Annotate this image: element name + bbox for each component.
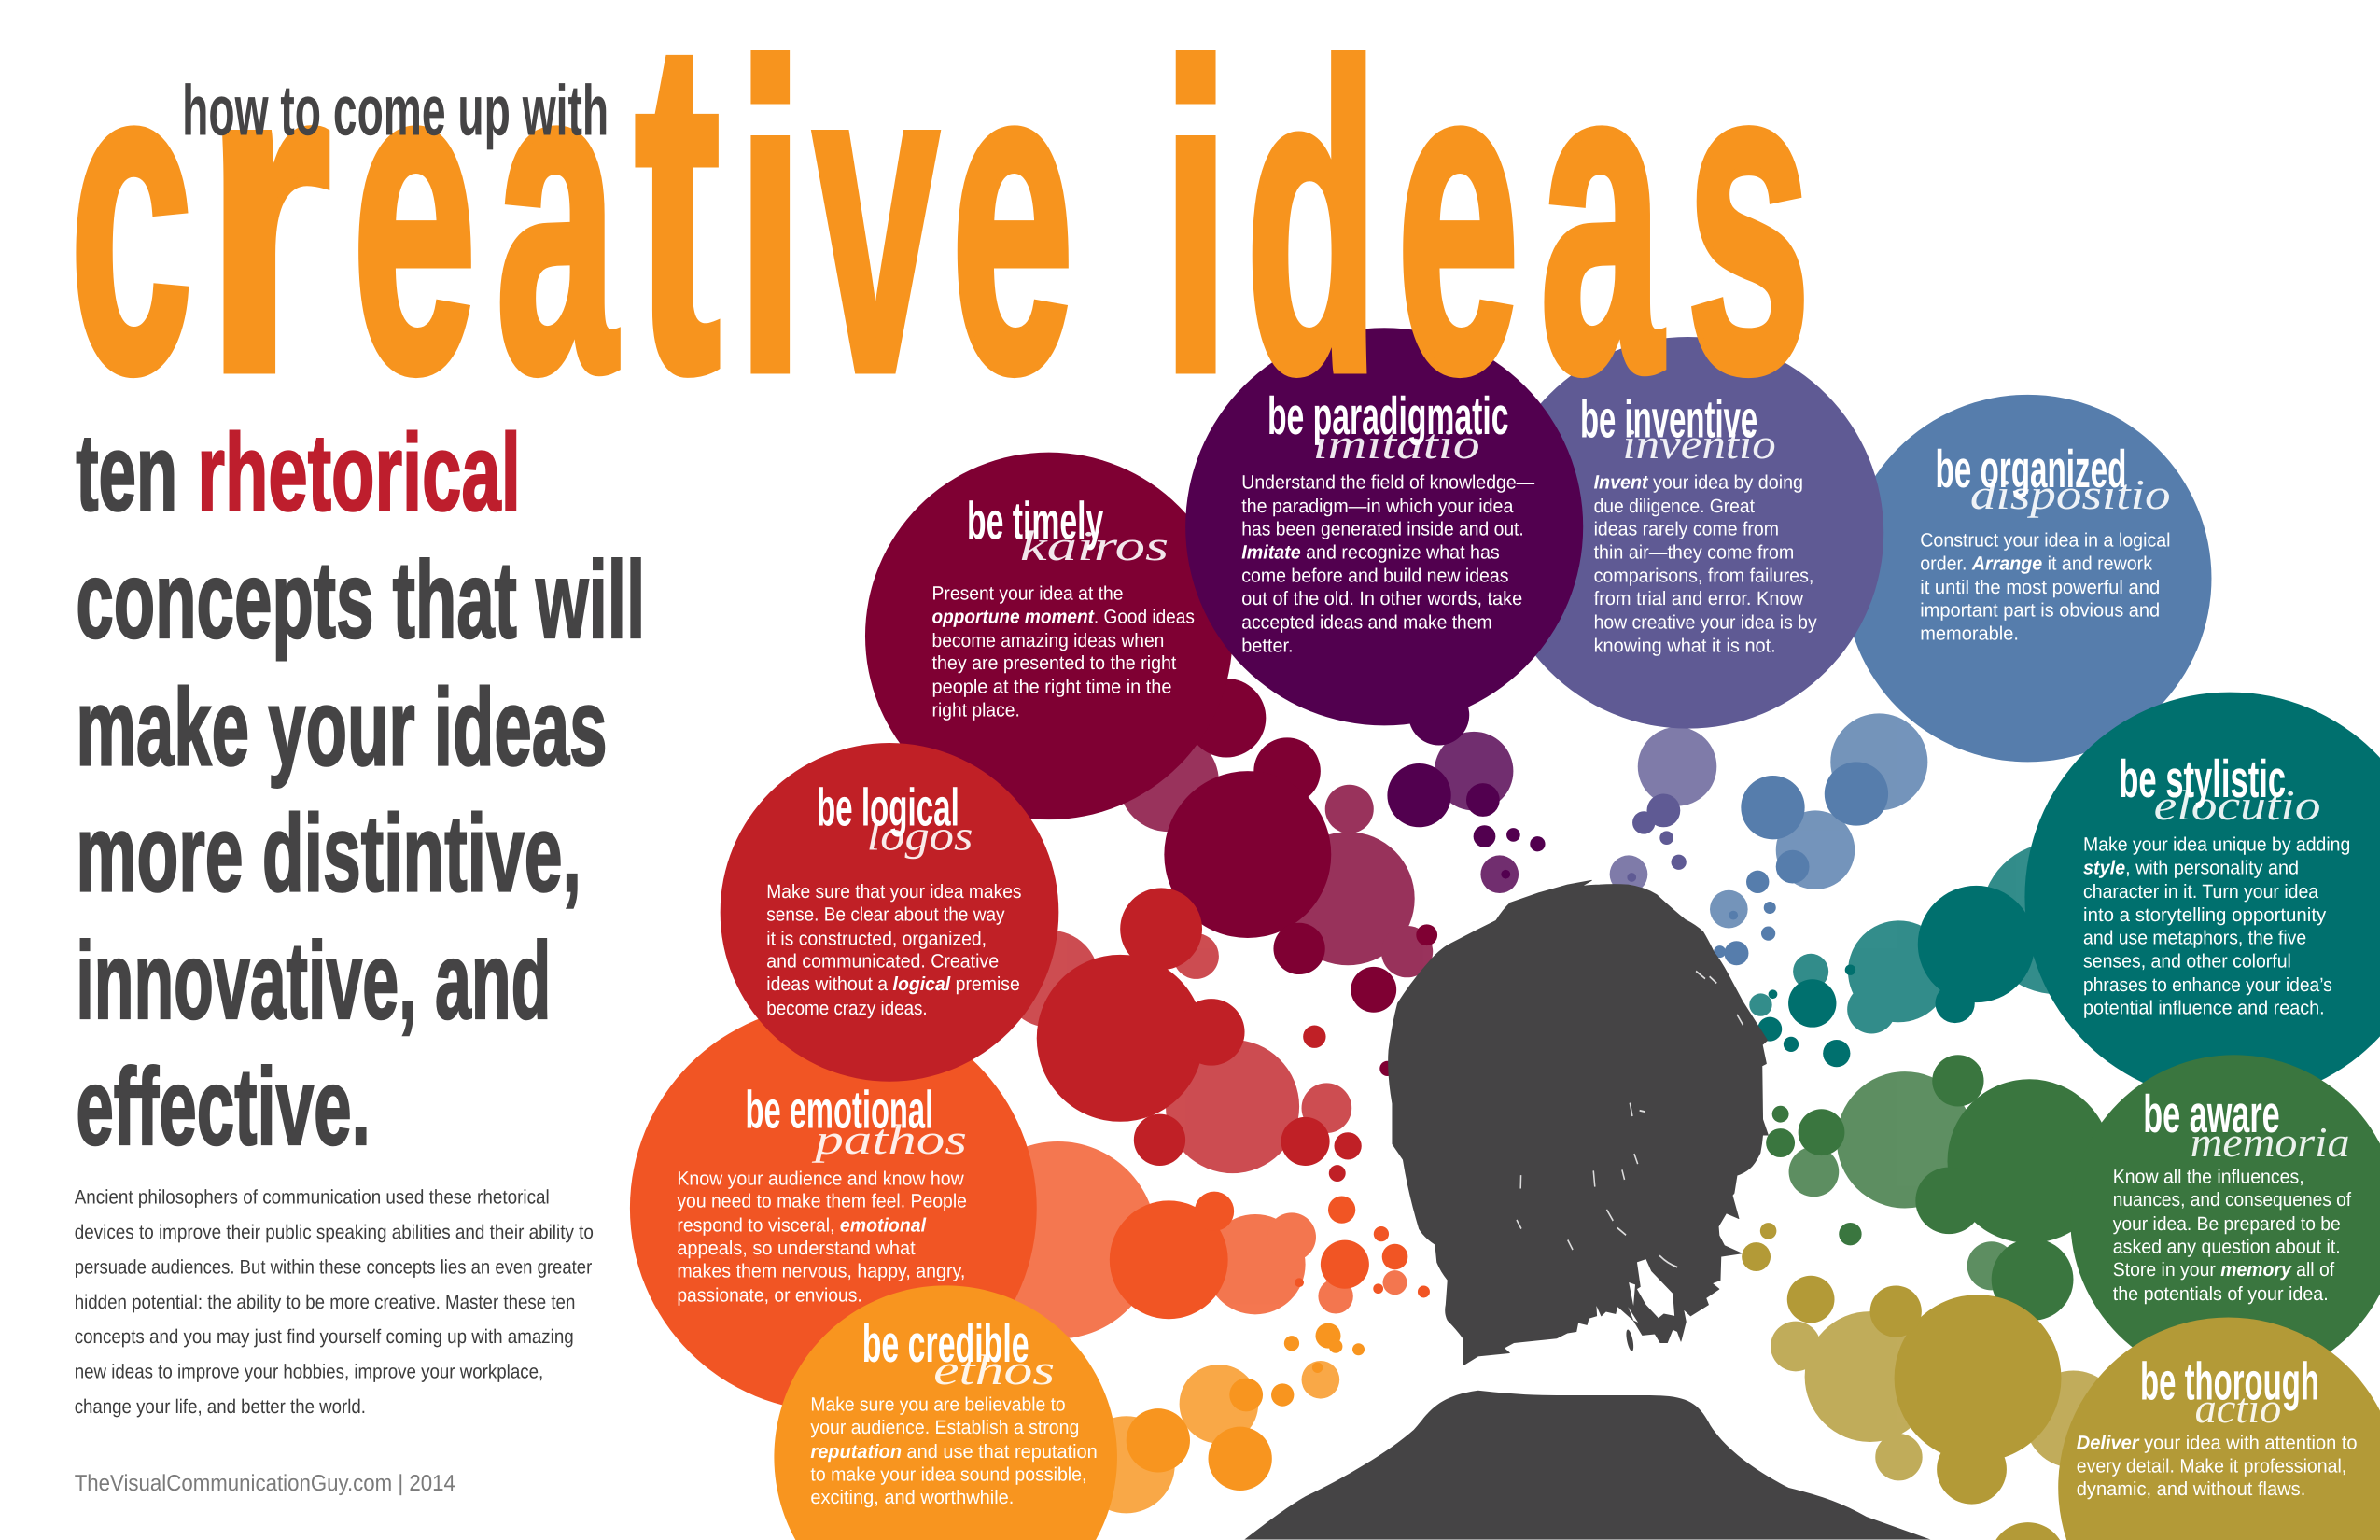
- body: paradigmatic: has been generated inside and out.: [1241, 518, 1524, 539]
- intro paragraph: persuade audiences. But within these concepts lies an even greater: [75, 1255, 593, 1278]
- panel: be paradigmatic: [1185, 328, 1583, 725]
- body: credible: your audience. Establish a strong: [810, 1417, 1079, 1438]
- headline: ten rhetorical concepts: rhetorical: [197, 413, 521, 534]
- body: inventive: knowing what it is not.: [1594, 636, 1776, 656]
- headline: ten rhetorical concepts: more distintive,: [76, 794, 581, 916]
- body: aware: Store in your memory all of: [2113, 1259, 2335, 1281]
- body: inventive: ideas rarely come from: [1594, 518, 1779, 539]
- body: thorough: dynamic, and without flaws.: [2077, 1478, 2305, 1500]
- body: logical: become crazy ideas.: [766, 998, 928, 1019]
- body: emotional: respond to visceral, emotional: [677, 1215, 927, 1237]
- body: emotional: Know your audience and know how: [677, 1168, 965, 1189]
- headline: ten rhetorical concepts: concepts that will: [76, 540, 645, 662]
- body: inventive: [1594, 472, 1818, 656]
- body: timely: Present your idea at the: [932, 582, 1123, 604]
- panel: be inventive: [1492, 337, 1883, 729]
- body: stylistic: senses, and other colorful: [2083, 951, 2291, 973]
- body: organized: memorable.: [1920, 623, 2019, 644]
- subtitle: kairos: kairos: [1020, 524, 1169, 570]
- panel: be aware: [2070, 1055, 2380, 1383]
- body: organized: Construct your idea in a logical: [1920, 530, 2171, 551]
- panel: be emotional: [630, 1005, 1037, 1411]
- body: paradigmatic: out of the old. In other words, take: [1241, 588, 1522, 609]
- body: inventive: from trial and error. Know: [1594, 588, 1804, 609]
- body: stylistic: and use metaphors, the five: [2083, 928, 2306, 948]
- bubbles: stylistic: [1749, 843, 2133, 1067]
- heading: be paradigmatic: be paradigmatic: [1267, 387, 1509, 446]
- body: emotional: [677, 1168, 967, 1306]
- body: organized: it until the most powerful and: [1920, 577, 2160, 598]
- heading: be logical: be logical: [817, 778, 959, 838]
- body: logical: ideas without a logical premise: [766, 973, 1020, 995]
- body: paradigmatic: come before and build new ideas: [1241, 566, 1509, 587]
- subtitle: inventio: inventio: [1622, 422, 1776, 469]
- body: logical: [766, 881, 1021, 1019]
- body: paradigmatic: [1241, 472, 1535, 656]
- bubbles: thorough: [1742, 1223, 2122, 1540]
- body: inventive: comparisons, from failures,: [1594, 566, 1813, 587]
- subtitle: logos: logos: [867, 814, 973, 861]
- bubbles: emotional: [959, 1141, 1430, 1338]
- body: stylistic: style, with personality and: [2083, 858, 2299, 879]
- body: logical: and communicated. Creative: [766, 951, 999, 973]
- bubbles: timely: [1119, 679, 1437, 1076]
- body: logical: Make sure that your idea makes: [766, 881, 1021, 903]
- headline: ten rhetorical concepts: effective.: [76, 1047, 371, 1169]
- body: thorough: Deliver your idea with attention to: [2077, 1432, 2358, 1453]
- subtitle: ethos: ethos: [933, 1348, 1055, 1395]
- body: paradigmatic: Understand the field of knowledge—: [1241, 472, 1535, 494]
- body: timely: they are presented to the right: [932, 652, 1177, 674]
- subtitle: memoria: memoria: [2191, 1120, 2349, 1168]
- body: stylistic: phrases to enhance your idea’s: [2083, 974, 2332, 996]
- headline: ten rhetorical concepts: make your ideas: [76, 668, 608, 790]
- body: emotional: makes them nervous, happy, angry,: [677, 1261, 965, 1281]
- bubbles: logical: [1001, 888, 1362, 1182]
- body: stylistic: character in it. Turn your idea: [2083, 881, 2320, 903]
- intro paragraph: change your life, and better the world.: [75, 1395, 366, 1418]
- body: paradigmatic: Imitate and recognize what has: [1241, 542, 1500, 563]
- headline: ten rhetorical concepts: innovative, and: [76, 921, 551, 1043]
- panel: be organized: [1844, 395, 2211, 762]
- intro paragraph: devices to improve their public speaking abilities and their ability to: [75, 1221, 594, 1243]
- heading: be timely: be timely: [967, 492, 1104, 551]
- body: organized: important part is obvious and: [1920, 599, 2160, 621]
- intro paragraph: concepts and you may just find yourself coming up with amazing: [75, 1325, 574, 1348]
- intro paragraph: hidden potential: the ability to be more creative. Master these ten: [75, 1290, 575, 1313]
- heading: be aware: be aware: [2143, 1085, 2280, 1144]
- body: aware: asked any question about it.: [2113, 1237, 2341, 1257]
- subtitle: dispositio: dispositio: [1970, 472, 2171, 519]
- body: aware: your idea. Be prepared to be: [2113, 1213, 2341, 1235]
- body: aware: [2113, 1167, 2352, 1305]
- subtitle: pathos: pathos: [811, 1117, 967, 1164]
- headline: ten rhetorical concepts: ten: [76, 413, 177, 534]
- body: timely: right place.: [932, 700, 1020, 721]
- body: stylistic: into a storytelling opportunity: [2083, 904, 2327, 926]
- body: inventive: thin air—they come from: [1594, 542, 1794, 563]
- body: inventive: how creative your idea is by: [1594, 611, 1818, 633]
- body: credible: Make sure you are believable to: [810, 1394, 1066, 1415]
- body: aware: the potentials of your idea.: [2113, 1283, 2329, 1305]
- body: paradigmatic: better.: [1241, 636, 1294, 656]
- bubbles: organized: [1710, 713, 1927, 965]
- title lead-in: how to come up with: how to come up with: [182, 70, 609, 150]
- footer credit: TheVisualCommunicationGuy.com | 2014: [75, 1471, 455, 1496]
- intro paragraph: [75, 1185, 594, 1418]
- subtitle: actio: actio: [2195, 1386, 2281, 1433]
- body: logical: it is constructed, organized,: [766, 928, 987, 949]
- body: timely: become amazing ideas when: [932, 630, 1164, 651]
- body: timely: [932, 582, 1195, 721]
- intro paragraph: Ancient philosophers of communication used these rhetorical: [75, 1185, 550, 1209]
- body: emotional: you need to make them feel. People: [677, 1191, 967, 1212]
- body: credible: reputation and use that reputation: [810, 1441, 1098, 1463]
- body: inventive: Invent your idea by doing: [1594, 472, 1803, 494]
- body: credible: [810, 1394, 1098, 1508]
- body: timely: opportune moment. Good ideas: [932, 607, 1195, 627]
- heading: be organized: be organized: [1935, 441, 2126, 499]
- body: stylistic: [2083, 834, 2350, 1018]
- panel: be stylistic: [2024, 693, 2380, 1102]
- panel: be credible: [774, 1285, 1117, 1540]
- bubbles: inventive: [1610, 727, 1716, 893]
- body: aware: Know all the influences,: [2113, 1167, 2304, 1188]
- bubbles: aware: [1766, 1055, 2111, 1321]
- body: organized: [1920, 530, 2171, 644]
- body: thorough: every detail. Make it professional,: [2077, 1456, 2346, 1477]
- body: emotional: appeals, so understand what: [677, 1238, 916, 1259]
- headline: ten rhetorical concepts: [76, 413, 645, 1169]
- body: stylistic: potential influence and reach.: [2083, 997, 2325, 1018]
- panel: be timely: [865, 453, 1233, 819]
- heading: be emotional: be emotional: [746, 1081, 933, 1140]
- body: inventive: due diligence. Great: [1594, 496, 1756, 517]
- heading: be credible: be credible: [862, 1314, 1029, 1374]
- intro paragraph: new ideas to improve your hobbies, improve your workplace,: [75, 1360, 543, 1383]
- subtitle: elocutio: elocutio: [2154, 783, 2321, 831]
- body: organized: order. Arrange it and rework: [1920, 553, 2153, 575]
- heading: be inventive: be inventive: [1580, 390, 1757, 449]
- panel: be thorough: [2058, 1317, 2380, 1540]
- bubbles: paradigmatic: [1387, 684, 1546, 893]
- body: credible: to make your idea sound possible,: [810, 1464, 1086, 1485]
- body: logical: sense. Be clear about the way: [766, 903, 1006, 925]
- body: stylistic: Make your idea unique by adding: [2083, 834, 2350, 855]
- body: paradigmatic: the paradigm—in which your idea: [1241, 496, 1515, 517]
- body: aware: nuances, and consequenes of: [2113, 1189, 2352, 1211]
- body: paradigmatic: accepted ideas and make them: [1241, 611, 1492, 633]
- body: thorough: [2077, 1432, 2358, 1500]
- body: credible: exciting, and worthwhile.: [810, 1487, 1014, 1508]
- icon: head and shoulders silhouette: [1244, 880, 1930, 1540]
- subtitle: imitatio: imitatio: [1313, 422, 1480, 469]
- body: emotional: passionate, or envious.: [677, 1285, 862, 1306]
- bubbles: credible: [1078, 1323, 1365, 1513]
- panel: be logical: [721, 743, 1058, 1082]
- body: timely: people at the right time in the: [932, 676, 1171, 697]
